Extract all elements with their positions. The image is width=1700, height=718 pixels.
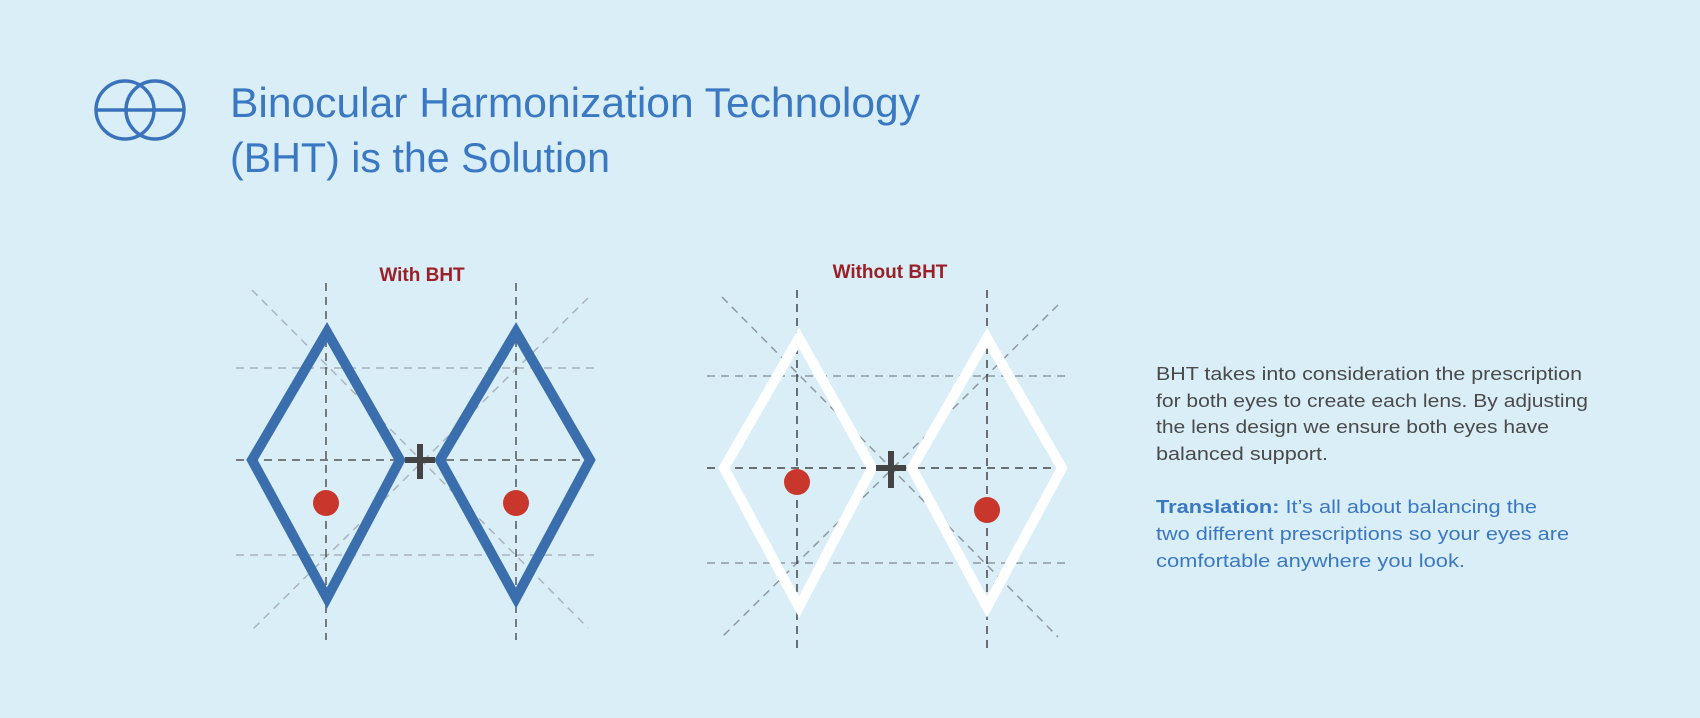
plus marker <box>876 451 906 488</box>
text block: translation: comfortable anywhere you look. <box>1156 550 1465 571</box>
red dots <box>313 490 529 516</box>
title: Binocular Harmonization Technology <box>230 79 920 126</box>
heading: With BHT: With BHT <box>379 265 465 286</box>
text block: description: balanced support. <box>1156 443 1328 464</box>
plus marker <box>405 444 435 479</box>
lens diamonds (blue) <box>252 332 590 598</box>
panel: without BHT <box>707 262 1067 648</box>
title: (BHT) is the Solution <box>230 134 610 181</box>
red dots <box>784 469 1000 523</box>
text block: description <box>1156 363 1588 464</box>
text block: translation: Translation: It’s all about balancing the <box>1156 496 1537 517</box>
text block: translation: two different prescriptions so your eyes are <box>1156 523 1569 544</box>
heading: Without BHT: Without BHT <box>833 262 948 283</box>
text block: translation <box>1156 496 1569 571</box>
icon: binocular circles <box>96 81 184 139</box>
lens diamonds (white) <box>724 338 1062 607</box>
title <box>230 79 920 181</box>
panel: with BHT <box>236 265 597 640</box>
text block: description: the lens design we ensure both eyes have <box>1156 416 1549 437</box>
text block: description: for both eyes to create each lens. By adjusting <box>1156 390 1588 411</box>
text block: description: BHT takes into consideration the prescription <box>1156 363 1582 384</box>
